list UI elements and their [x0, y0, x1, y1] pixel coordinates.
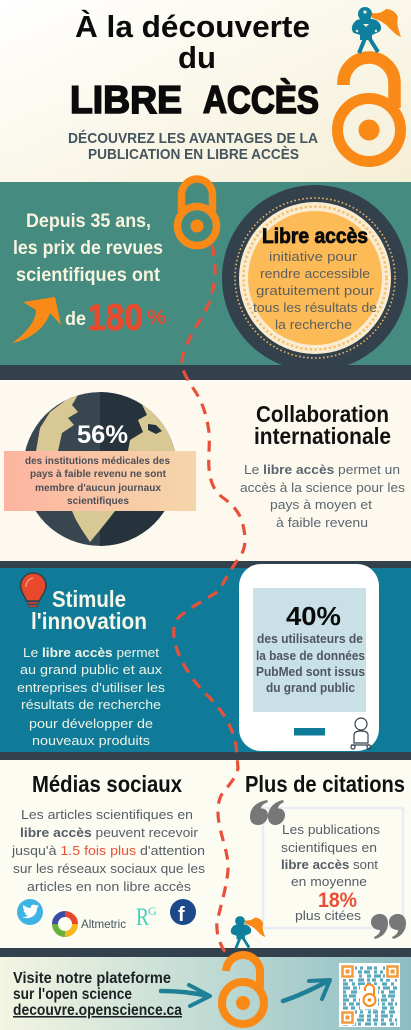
- text: social media body: articles en non libre accès: [27, 879, 192, 894]
- text: definition: initiative pour: [269, 249, 358, 264]
- text: price rise: de: [65, 309, 86, 330]
- icon: facebook: [170, 899, 196, 926]
- divider band: [0, 561, 411, 568]
- callout: 56% box: [4, 451, 196, 511]
- title: À la découverte: [75, 9, 310, 44]
- text: social media body: libre accès peuvent recevoir: [20, 825, 199, 840]
- icon: small superhero: [231, 916, 265, 948]
- header panel: [0, 0, 411, 182]
- icon: closing quote: [371, 914, 406, 939]
- text: price rise: [13, 211, 163, 330]
- icon: researchgate: G: [148, 904, 157, 918]
- heading: collaboration internationale: [254, 401, 391, 449]
- number: 180%: 180: [87, 297, 143, 338]
- text: call to action: decouvre.openscience.ca: [13, 1002, 182, 1019]
- text: citations body: en moyenne: [291, 874, 367, 889]
- text: social media body: [11, 807, 206, 894]
- text: social media body: sur les réseaux sociaux que les: [13, 861, 206, 876]
- icon: researchgate: R: [136, 904, 149, 931]
- divider band: [0, 948, 411, 957]
- text: innovation body: entreprises d'utiliser les: [17, 680, 166, 695]
- text: innovation body: nouveaux produits: [32, 733, 151, 748]
- text: collaboration body: [240, 462, 406, 530]
- text: call to action: [13, 970, 182, 1019]
- icon: footer open access logo: [222, 955, 264, 1024]
- text: citations body: scientifiques en: [281, 840, 377, 855]
- divider band: [0, 752, 411, 760]
- text: pubmed: du grand public: [266, 681, 355, 695]
- number: 180%: %: [147, 307, 166, 329]
- icon: twitter: [17, 899, 43, 925]
- icon: altmetric: [55, 914, 126, 934]
- panel: price increase: [0, 182, 411, 365]
- text: social media body: jusqu'à 1.5 fois plus d'attention: [11, 843, 205, 858]
- title: [70, 9, 319, 122]
- heading: medias sociaux: Médias sociaux: [32, 771, 182, 797]
- label: altmetric: Altmetric: [81, 917, 126, 931]
- text: call to action: sur l'open science: [13, 986, 132, 1003]
- text: definition: [253, 249, 377, 332]
- text: definition: gratuitement pour: [256, 283, 375, 298]
- text: pubmed: la base de données: [256, 649, 365, 663]
- icon: light bulb: [20, 573, 46, 607]
- text: social media body: Les articles scientifiques en: [21, 807, 193, 822]
- panel: collaboration: [4, 392, 404, 546]
- icon: qr code: [339, 963, 400, 1027]
- subtitle: DÉCOUVREZ LES AVANTAGES DE LA: [68, 130, 318, 147]
- text: price rise: les prix de revues: [13, 238, 163, 259]
- text: collaboration body: Le libre accès permet un: [244, 462, 400, 477]
- text: institutions: membre d'aucun journaux: [35, 482, 161, 494]
- number: 56%: 56%: [77, 421, 128, 449]
- number: 40%: 40%: [286, 601, 341, 631]
- heading: collaboration internationale: Collaboration: [256, 401, 389, 427]
- text: citations body: libre accès sont: [281, 857, 378, 872]
- text: pubmed: des utilisateurs de: [257, 632, 363, 646]
- text: price rise: scientifiques ont: [16, 265, 161, 286]
- panel: innovation: [0, 564, 411, 752]
- heading: stimule l'innovation: l'innovation: [31, 608, 147, 634]
- arrow: to qr code: [283, 980, 330, 1001]
- text: institutions: pays à faible revenu ne sont: [30, 468, 166, 480]
- heading: stimule l'innovation: Stimule: [52, 586, 126, 612]
- text: institutions: des institutions médicales des: [25, 455, 170, 467]
- heading: libre acces: Libre accès: [262, 225, 368, 248]
- icon: laptop user: [351, 718, 371, 749]
- text: citations body: plus citées: [295, 908, 362, 923]
- text: citations body: [281, 822, 381, 923]
- text: call to action: Visite notre plateforme: [13, 970, 171, 987]
- text: pubmed: [256, 632, 365, 695]
- text: definition: tous les résultats de: [253, 300, 377, 315]
- heading: stimule l'innovation: [31, 586, 147, 634]
- text: institutions: [25, 455, 170, 507]
- number: 18%: 18%: [318, 889, 357, 912]
- title: du: [178, 40, 216, 75]
- divider band: [0, 365, 411, 380]
- title: LIBRE: [70, 79, 182, 122]
- icon: facebook: f: [178, 904, 185, 926]
- text: innovation body: pour développer de: [29, 716, 153, 731]
- panel: social media and citations: [0, 760, 411, 948]
- callout: citations box: [250, 800, 406, 939]
- text: definition: la recherche: [275, 317, 352, 332]
- panel: footer: [0, 957, 411, 1030]
- text: innovation body: au grand public et aux: [20, 662, 163, 677]
- icon: globe: [23, 390, 180, 550]
- text: collaboration body: pays à moyen et: [270, 497, 372, 512]
- panel: libre acces definition circle: [222, 185, 408, 371]
- text: innovation body: [17, 645, 166, 748]
- icon: rising arrow: [12, 297, 61, 343]
- icon: open access logo: [338, 58, 400, 162]
- text: pubmed: PubMed sont issus: [256, 665, 365, 679]
- icon: opening quote: [250, 800, 285, 825]
- text: collaboration body: accès à la science pour les: [240, 480, 406, 495]
- text: institutions: scientifiques: [67, 495, 129, 507]
- subtitle: [68, 130, 318, 163]
- text: collaboration body: à faible revenu: [276, 515, 368, 530]
- text: innovation body: Le libre accès permet: [23, 645, 159, 660]
- title: ACCÈS: [203, 78, 319, 122]
- heading: collaboration internationale: internationale: [254, 423, 391, 449]
- icon: dashed path: [174, 245, 245, 956]
- icon: tablet: [239, 564, 379, 751]
- text: citations body: Les publications: [282, 822, 381, 837]
- subtitle: PUBLICATION EN LIBRE ACCÈS: [88, 146, 299, 163]
- icon: padlock: [178, 179, 216, 246]
- arrow: to logo: [161, 985, 210, 1006]
- text: definition: rendre accessible: [260, 266, 370, 281]
- icon: superhero: [352, 7, 401, 53]
- text: price rise: Depuis 35 ans,: [26, 211, 151, 232]
- text: innovation body: résultats de recherche: [21, 697, 161, 712]
